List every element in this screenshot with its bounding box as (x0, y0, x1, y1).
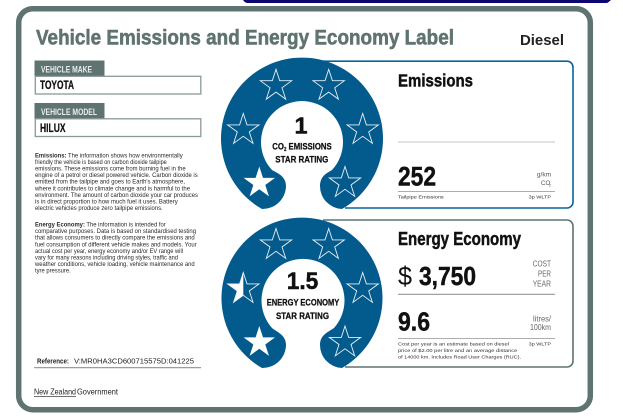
emissions unit (537, 172, 551, 188)
fuel consumption value: 9.6 (398, 307, 430, 337)
energy economy explanation text: Energy Economy: The information is intended for (35, 222, 166, 228)
title: Vehicle Emissions and Energy Economy Label (36, 26, 454, 50)
energy economy explanation text: comparative purposes. Data is based on standardised testing (35, 228, 197, 235)
CO2 rating value: 1 (294, 112, 308, 138)
star 6 outline (329, 166, 361, 196)
cost estimate note: price of $2.00 per litre and an average distance (398, 348, 518, 354)
energy rating caption: ENERGY ECONOMY (267, 298, 339, 308)
reference number: V:MR0HA3CD600715575D:041225 (74, 356, 194, 365)
star 5 filled (244, 326, 275, 356)
star 2 outline (313, 228, 344, 258)
cost per year value (398, 261, 476, 291)
energy economy explanation text: tyre pressure. (35, 268, 71, 275)
cost per year label: COST (533, 259, 551, 269)
vehicle make field (34, 60, 201, 94)
emissions explanation text: friendly the vehicle is based on carbon dioxide tailpipe (35, 159, 167, 166)
vehicle make field: VEHICLE MAKE (41, 65, 92, 75)
cost per year value: 3,750 (419, 263, 476, 291)
test standard: 3p WLTP (529, 194, 551, 200)
fuel consumption unit: 100km (530, 323, 551, 332)
cost per year label: PER (538, 269, 551, 279)
fuel consumption unit: litres/ (533, 315, 552, 324)
reference number (34, 356, 201, 368)
panel: emissions (323, 61, 573, 208)
vehicle model field (34, 103, 201, 136)
energy economy explanation text: actual cost per year, energy economy and/or EV range will (35, 248, 183, 255)
star 6 outline (329, 326, 361, 356)
energy economy star rating horseshoe (222, 218, 383, 368)
energy economy explanation text: weather conditions, vehicle loading, vehicle maintenance and (34, 261, 195, 268)
star 2 outline (313, 69, 344, 99)
star 4 outline (347, 114, 378, 143)
CO2 rating caption: STAR RATING (275, 154, 328, 164)
cost estimate note (398, 341, 521, 360)
energy economy explanation text: that allows consumers to directly compare the emissions and (35, 235, 195, 242)
New Zealand Government logo (34, 386, 119, 397)
panel: energy economy (323, 220, 573, 367)
tailpipe emissions caption: Tailpipe Emissions (398, 194, 444, 200)
CO2 rating caption: 2 (284, 147, 287, 153)
emissions explanation text: is in direct proportion to how much fuel it uses. Battery (35, 198, 179, 206)
energy economy explanation text (34, 222, 197, 275)
cost per year label: YEAR (533, 279, 551, 289)
energy economy explanation text: fuel consumption of different vehicle makes and models. Your (35, 241, 197, 248)
emissions unit: 2 (549, 184, 551, 188)
energy rating caption (267, 298, 339, 321)
vehicle model field: VEHICLE MODEL (41, 107, 97, 117)
reference number: Reference: (37, 356, 69, 365)
fuel consumption unit (530, 315, 552, 332)
emissions explanation text: emissions. These emissions come from burning fuel in the (35, 166, 186, 172)
star 1 outline (260, 228, 292, 258)
cost per year value: $ (398, 261, 413, 291)
cost per year label (533, 259, 551, 289)
emissions unit: CO (541, 180, 550, 187)
star 3 outline (228, 114, 259, 143)
CO2 emissions star rating horseshoe (221, 58, 383, 209)
emissions explanation text: electric vehicles produce zero tailpipe emissions. (35, 205, 163, 212)
star 5 filled (244, 166, 275, 196)
New Zealand Government logo: Government (77, 386, 119, 396)
emissions explanation text: engine of a petrol or diesel powered vehicle. Carbon dioxide is (35, 172, 198, 179)
vehicle make field: TOYOTA (40, 80, 74, 92)
star 3 half filled (228, 272, 259, 302)
tailpipe emissions value: 252 (398, 162, 436, 192)
energy economy explanation text: vary for many reasons including driving styles, traffic and (35, 254, 179, 262)
test standard: 3p WLTP (529, 341, 551, 347)
energy rating caption: STAR RATING (276, 311, 329, 321)
cost estimate note: of 14000 km. Includes Road User Charges (RUC). (398, 354, 521, 360)
emissions unit: g/km (537, 172, 551, 179)
CO2 rating caption: CO (272, 141, 286, 151)
fuel type: Diesel (520, 32, 564, 49)
vehicle model field: HILUX (40, 123, 66, 135)
emissions explanation text (34, 152, 198, 212)
top navy bar (243, 0, 611, 3)
energy rating value: 1.5 (287, 268, 318, 295)
CO2 rating caption (272, 141, 332, 164)
energy economy heading: Energy Economy (398, 229, 521, 249)
star 4 outline (347, 272, 378, 302)
emissions explanation text: environment. The amount of carbon dioxide your car produces (35, 192, 198, 199)
emissions explanation text: Emissions: The information shows how environmentally (35, 152, 184, 159)
emissions explanation text: emitted from the tailpipe and goes to Earth's atmosphere, (35, 179, 185, 186)
New Zealand Government logo: New Zealand (34, 386, 76, 396)
emissions explanation text: where it contributes to climate change and is harmful to the (34, 185, 191, 192)
cost estimate note: Cost per year is an estimate based on diesel (398, 341, 509, 347)
CO2 rating caption: EMISSIONS (286, 141, 332, 151)
star 1 outline (260, 69, 292, 99)
emissions heading: Emissions (398, 71, 473, 91)
